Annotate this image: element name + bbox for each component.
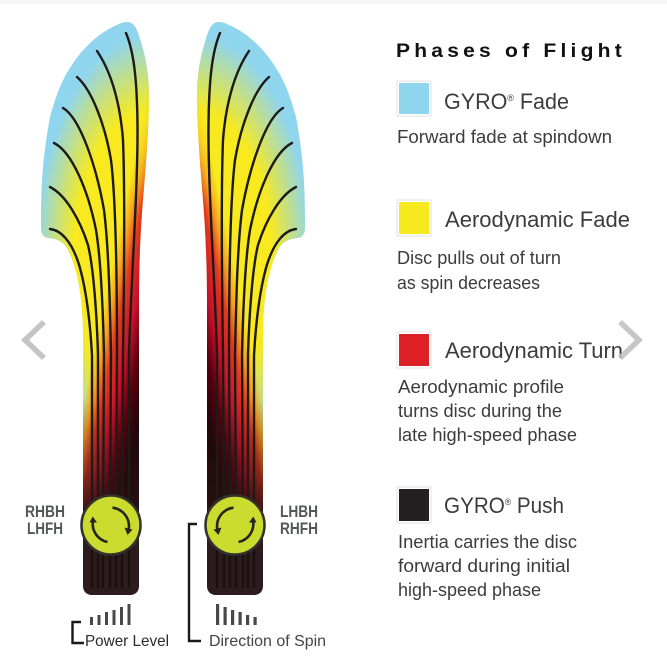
label: RHBH LHFH: LHFH: [27, 520, 63, 538]
heading: Phases of Flight: Phases of Flight: [396, 41, 622, 62]
right flight fin chart: [186, 15, 316, 605]
legend: Aerodynamic Turn: late high-speed phase: [398, 425, 577, 445]
icon: right spin disc: [206, 496, 264, 554]
label: LHBH RHFH: RHFH: [280, 520, 318, 538]
label: LHBH RHFH: LHBH: [280, 503, 318, 521]
legend: GYRO Fade: GYRO: [444, 89, 509, 114]
legend: GYRO Push: Inertia carries the disc: [398, 532, 577, 552]
direction of spin key: [189, 524, 326, 650]
legend: Aerodynamic Turn: Aerodynamic profile: [398, 377, 564, 397]
arrow: previous: [25, 322, 44, 358]
icon: left spin disc: [82, 496, 140, 554]
label: RHBH LHFH: [25, 503, 65, 538]
arrow: next: [620, 322, 639, 358]
label: RHBH LHFH: RHBH: [25, 503, 65, 521]
direction of spin key: Direction of Spin: [209, 633, 326, 650]
legend: Aerodynamic Fade: Aerodynamic Fade: [445, 207, 630, 232]
legend: Aerodynamic Fade: [397, 200, 630, 293]
power level key: [72, 604, 169, 650]
legend: Aerodynamic Turn: Aerodynamic Turn: [445, 338, 623, 363]
legend: GYRO Fade: [397, 81, 612, 147]
legend: GYRO Push: forward during initial: [398, 556, 570, 576]
legend: GYRO Fade: Fade: [514, 89, 569, 114]
left flight fin chart: [30, 15, 160, 605]
legend: Aerodynamic Turn: [397, 332, 623, 445]
legend: Aerodynamic Fade: as spin decreases: [397, 273, 540, 293]
label: LHBH RHFH: [280, 503, 318, 538]
legend: GYRO Fade: ®: [507, 93, 514, 103]
legend: GYRO Push: high-speed phase: [398, 580, 541, 600]
legend: GYRO Push: Push: [511, 493, 564, 518]
legend: Aerodynamic Turn: turns disc during the: [398, 401, 562, 421]
legend: GYRO Push: GYRO: [444, 493, 509, 518]
power level key: Power Level: [85, 633, 169, 650]
legend: Aerodynamic Fade: Disc pulls out of turn: [397, 248, 561, 268]
legend: GYRO Push: ®: [505, 497, 511, 507]
legend: GYRO Push: [397, 487, 577, 600]
legend: GYRO Fade: Forward fade at spindown: [397, 127, 612, 147]
